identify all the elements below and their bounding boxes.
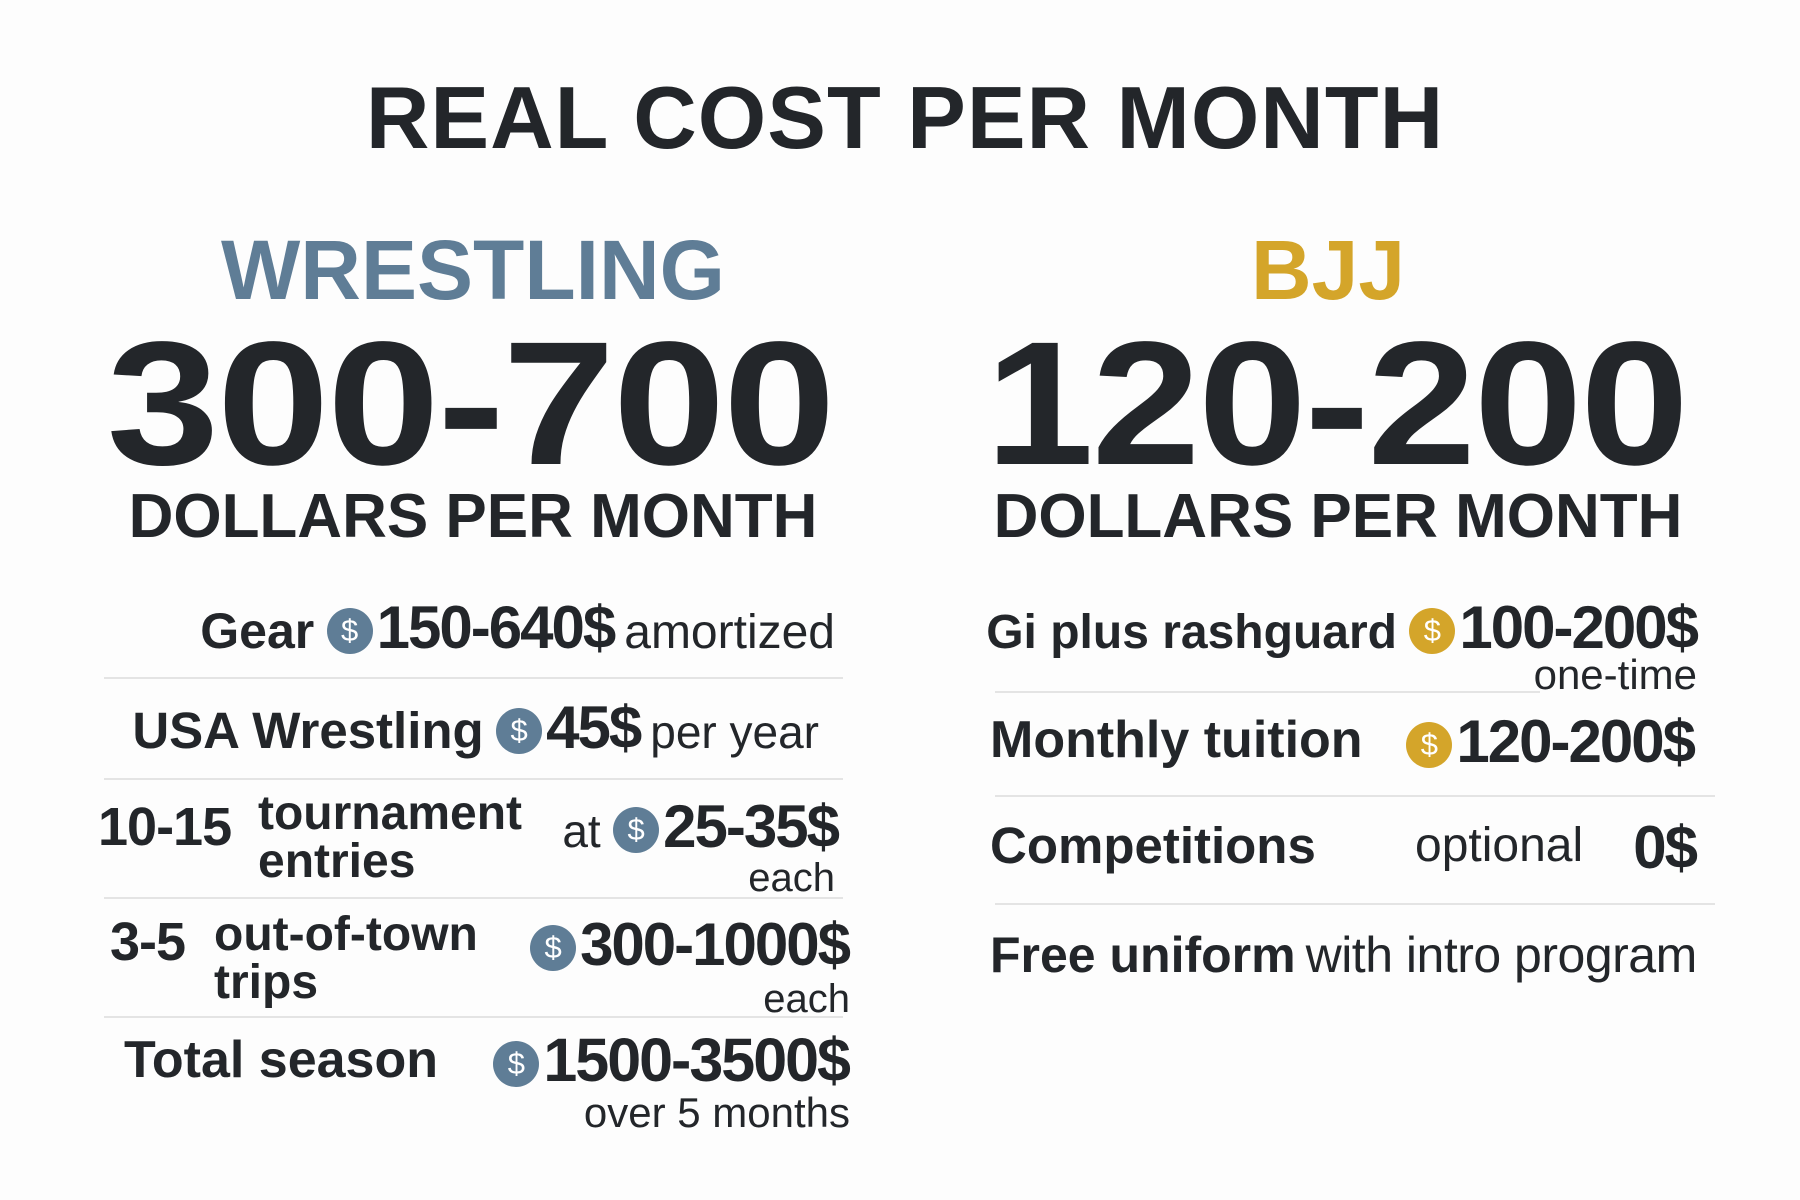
row: total season: 1500-3500$ <box>543 1026 849 1094</box>
bjj heading: BJJ <box>1251 223 1405 317</box>
row: usa wrestling: USA Wrestling 45$per year <box>132 694 819 761</box>
row: tournaments: each <box>748 856 835 900</box>
row: tournaments <box>98 787 840 900</box>
row: tournaments: 10-15 <box>98 797 231 857</box>
row: free uniform: Free uniformwith intro program <box>990 927 1697 983</box>
row: trips: $ <box>544 930 562 965</box>
row: tournaments: $ <box>628 812 645 847</box>
row: trips: out-of-town <box>214 908 478 961</box>
row: usa wrestling: $ <box>511 713 528 748</box>
row: gear: Gear 150-640$amortized <box>200 594 835 661</box>
wrestling big number: 300-700 <box>107 306 833 502</box>
row: trips: trips <box>214 956 318 1009</box>
text: $ <box>1421 727 1438 762</box>
text: optional <box>1415 819 1583 872</box>
row: gi: $ <box>1424 613 1441 648</box>
title: REAL COST PER MONTH <box>366 68 1444 167</box>
text: 120-200$ <box>1456 708 1694 775</box>
row: total season: $ <box>508 1046 525 1081</box>
row: gear: $ <box>341 613 358 648</box>
bjj big number: 120-200 <box>985 306 1687 502</box>
text: 0$ <box>1633 814 1696 881</box>
row: tournaments: at 25-35$ <box>562 793 838 860</box>
row: trips <box>110 908 850 1021</box>
row: trips: each <box>763 977 850 1021</box>
row: total season: Total season <box>124 1031 438 1089</box>
row: tuition: Monthly tuition <box>990 711 1363 769</box>
row: tournaments: entries <box>258 835 415 888</box>
gi note: one-time <box>1534 651 1697 698</box>
bjj subtitle: DOLLARS PER MONTH <box>994 482 1682 551</box>
row: gi: Gi plus rashguard 100-200$ <box>986 594 1697 661</box>
wrestling heading: WRESTLING <box>221 223 725 317</box>
wrestling subtitle: DOLLARS PER MONTH <box>129 482 817 551</box>
row: trips: 300-1000$ <box>580 911 849 978</box>
row: total season <box>124 1026 850 1136</box>
row: tournaments: tournament <box>258 787 522 840</box>
row: trips: 3-5 <box>110 912 185 972</box>
row: competitions: Competitions <box>990 817 1316 874</box>
row: total season: over 5 months <box>584 1089 850 1136</box>
